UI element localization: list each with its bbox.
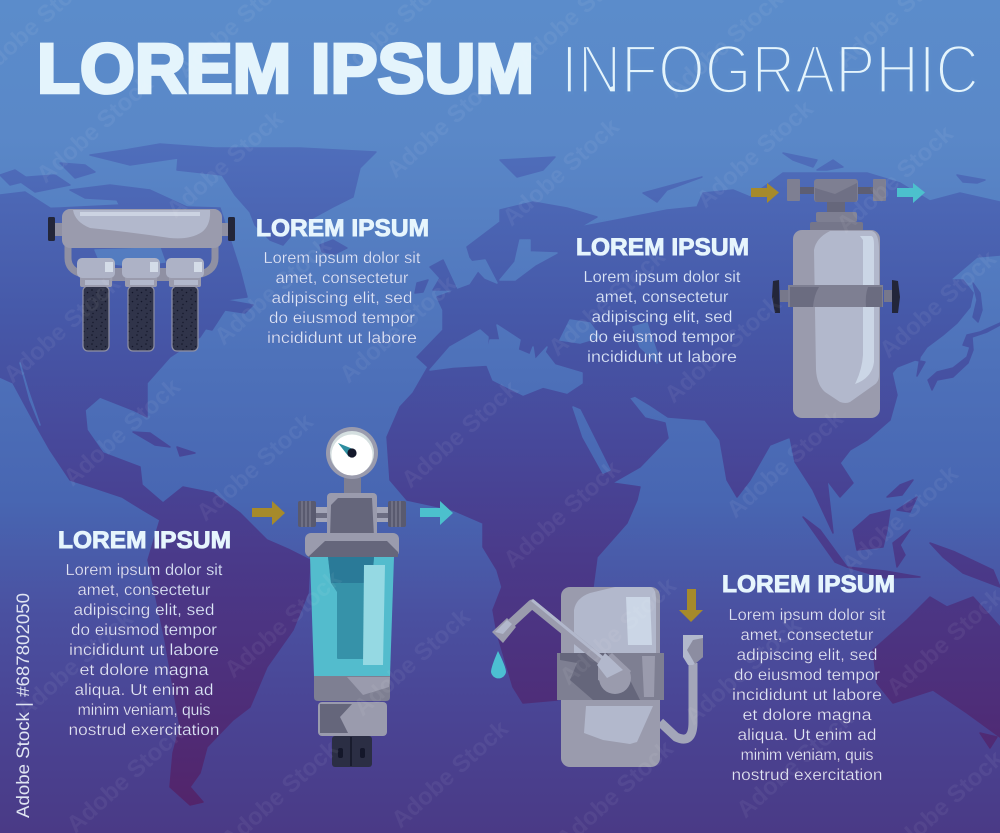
panel: bottom-right text: amet, consectetur	[740, 627, 874, 644]
stock watermarks: Adobe Stock	[731, 705, 859, 824]
stock watermarks: Adobe Stock	[721, 405, 849, 524]
panel: bottom-left text: adipiscing elit, sed	[74, 602, 214, 619]
stock watermarks: Adobe Stock	[498, 455, 626, 574]
panel: bottom-right text: aliqua. Ut enim ad	[738, 727, 876, 744]
arrow: outlet top right	[897, 183, 925, 203]
panel: bottom-right text: Lorem ipsum dolor sit	[728, 607, 886, 624]
stock watermarks: Adobe Stock	[31, 70, 159, 189]
panel: top-right text: amet, consectetur	[596, 289, 729, 306]
panel: bottom-right text: incididunt ut labore	[732, 687, 882, 704]
stock watermarks: Adobe Stock	[396, 375, 524, 494]
panel: bottom-left text: minim veniam, quis	[78, 702, 210, 719]
world map	[0, 144, 1000, 805]
stock watermarks: Adobe Stock	[386, 715, 514, 833]
stock watermarks: Adobe Stock	[11, 605, 139, 724]
panel: bottom-right text: do eiusmod tempor	[734, 667, 881, 684]
panel: top-left text: Lorem ipsum dolor sit	[264, 250, 421, 267]
stock watermarks: Adobe Stock	[497, 113, 625, 232]
stock watermarks: Adobe Stock	[831, 120, 959, 239]
stock watermarks: Adobe Stock	[58, 373, 186, 492]
panel: bottom-right text	[722, 571, 895, 784]
panel: top-right text: incididunt ut labore	[587, 349, 737, 366]
stock watermarks: Adobe Stock	[381, 65, 509, 184]
panel: bottom-right text: minim veniam, quis	[740, 747, 874, 764]
panel: bottom-left text: et dolore magna	[80, 662, 209, 679]
panel: top-right text: LOREM IPSUM	[576, 234, 749, 261]
panel: bottom-left text: amet, consectetur	[78, 582, 211, 599]
panel: top-left text	[256, 215, 429, 347]
panel: bottom-right text: LOREM IPSUM	[722, 571, 895, 598]
stock id side label: Adobe Stock | #687802050	[13, 593, 33, 818]
title: bold part: LOREM IPSUM	[37, 30, 534, 108]
panel: top-left text: adipiscing elit, sed	[272, 290, 412, 307]
pressure gauge	[326, 427, 378, 479]
panel: bottom-left text: nostrud exercitation	[68, 722, 220, 739]
panel: top-left text: LOREM IPSUM	[256, 215, 429, 242]
panel: bottom-right text: et dolore magna	[742, 707, 872, 724]
stock watermarks: Adobe Stock	[874, 245, 1000, 364]
panel: top-right text: Lorem ipsum dolor sit	[584, 269, 741, 286]
stock watermarks: Adobe Stock	[209, 232, 337, 351]
panel: top-left text: incididunt ut labore	[267, 330, 417, 347]
panel: top-right text	[576, 234, 749, 366]
panel: top-left text: amet, consectetur	[276, 270, 409, 287]
stock watermarks: Adobe Stock	[679, 612, 807, 731]
stock watermarks: Adobe Stock	[334, 270, 462, 389]
panel: bottom-left text: do eiusmod tempor	[71, 622, 218, 639]
stock watermarks: Adobe Stock	[191, 408, 319, 527]
stock watermarks: Adobe Stock	[554, 572, 682, 691]
icon: canister water filter	[772, 179, 900, 418]
arrow: inlet top right	[751, 183, 779, 203]
panel: bottom-right text: nostrud exercitation	[732, 767, 882, 784]
stock watermarks: Adobe Stock	[836, 460, 964, 579]
stock watermarks: Adobe Stock	[691, 95, 819, 214]
arrow: outlet right	[420, 501, 453, 525]
map seas and lakes	[20, 240, 657, 473]
stock watermarks: Adobe Stock	[348, 603, 476, 722]
stock watermarks: Adobe Stock	[161, 105, 289, 224]
stock watermarks: Adobe Stock	[659, 290, 787, 409]
panel: bottom-right text: adipiscing elit, sed	[736, 647, 878, 664]
arrow: inlet left	[252, 501, 285, 525]
stock watermarks: Adobe Stock	[543, 243, 671, 362]
icon: water drop	[491, 651, 506, 678]
panel: top-left text: do eiusmod tempor	[269, 310, 416, 327]
stock watermarks: Adobe Stock	[0, 270, 126, 389]
arrow: inlet down	[679, 589, 703, 622]
icon: three-stage water filter	[48, 209, 235, 351]
panel: bottom-left text: incididunt ut labore	[69, 642, 219, 659]
panel: bottom-left text	[58, 527, 231, 739]
panel: bottom-left text: Lorem ipsum dolor sit	[66, 562, 223, 579]
icon: gauge water filter	[298, 427, 406, 767]
panel: bottom-left text: LOREM IPSUM	[58, 527, 231, 554]
panel: top-right text: adipiscing elit, sed	[592, 309, 732, 326]
icon: faucet water filter	[492, 587, 703, 767]
panel: top-right text: do eiusmod tempor	[589, 329, 736, 346]
panel: bottom-left text: aliqua. Ut enim ad	[74, 682, 214, 699]
stock watermarks: Adobe Stock	[219, 565, 347, 684]
